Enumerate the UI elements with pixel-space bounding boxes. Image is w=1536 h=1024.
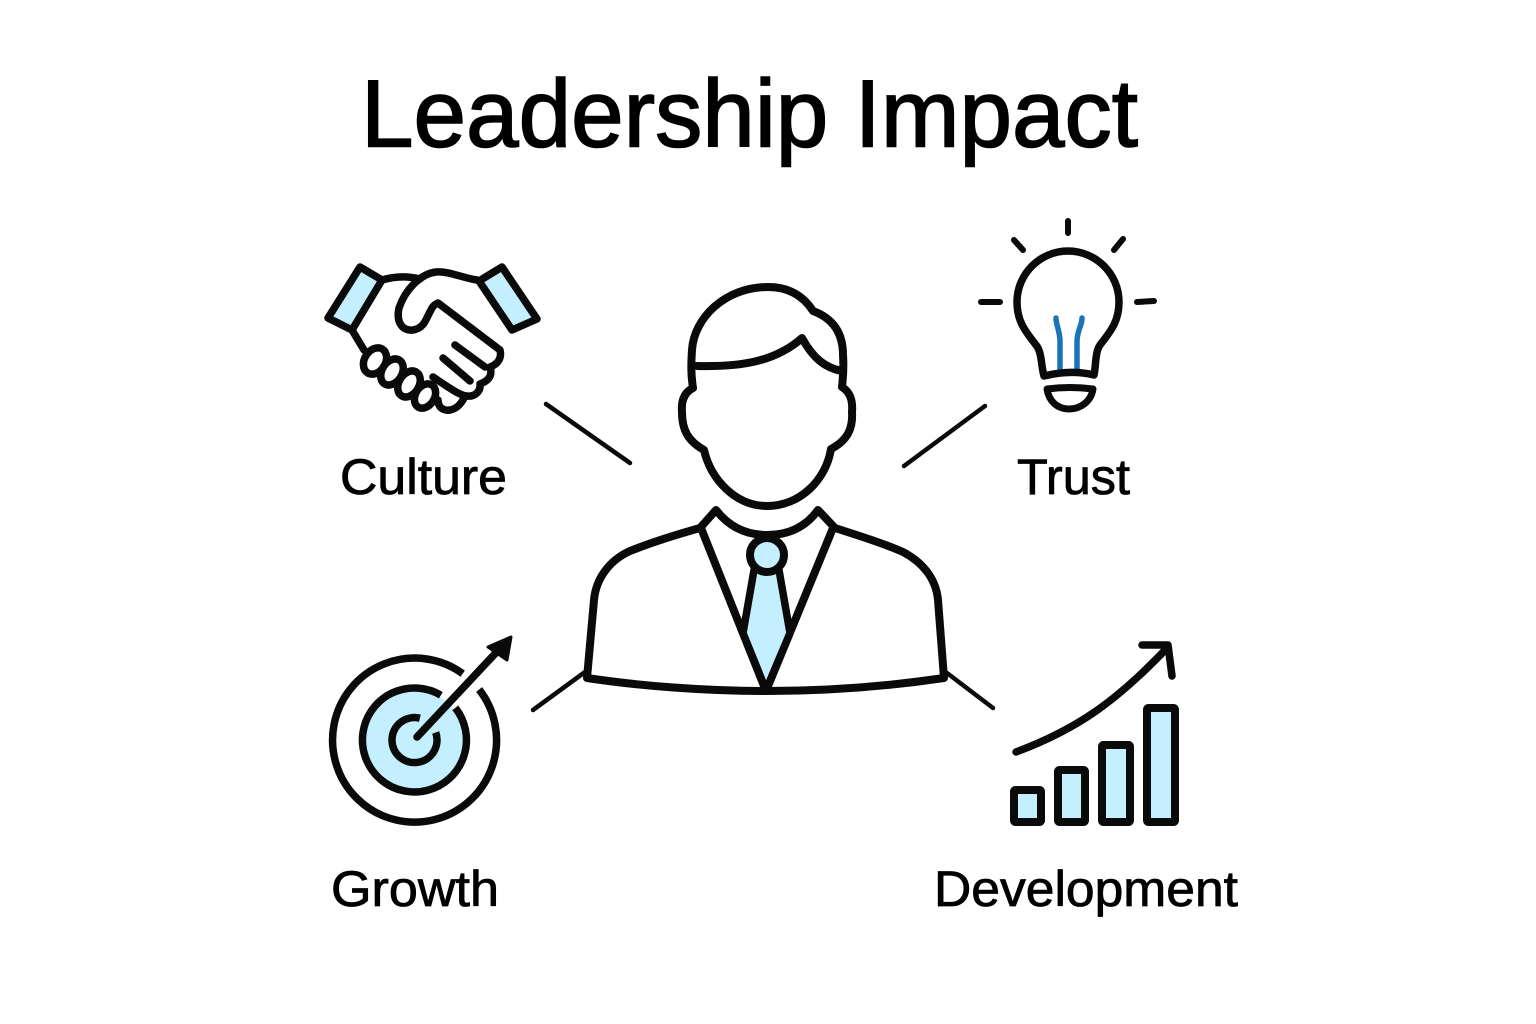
trend arrow xyxy=(1016,645,1172,752)
icon: handshake xyxy=(328,267,537,412)
leader head xyxy=(682,287,852,506)
bulb base xyxy=(1047,388,1093,409)
title: Leadership Impact xyxy=(361,60,1138,168)
target rings xyxy=(333,658,497,822)
icon: lightbulb xyxy=(981,221,1154,409)
hand knuckle 1 xyxy=(359,344,391,378)
bulb filaments xyxy=(1056,318,1082,369)
leader hair line xyxy=(697,338,842,371)
leader tie xyxy=(743,570,790,690)
bulb rays xyxy=(981,221,1154,302)
bar 2 xyxy=(1058,770,1085,822)
hand fingers xyxy=(443,345,485,381)
hand knuckle 2 xyxy=(376,355,408,389)
icon: bar chart xyxy=(1014,645,1175,822)
leader suit xyxy=(587,510,944,691)
connector: trust xyxy=(904,406,985,466)
bar 1 xyxy=(1014,790,1041,822)
hands outline xyxy=(352,272,501,410)
right cuff xyxy=(479,267,537,330)
target blue centre xyxy=(364,690,464,790)
label: Development: Development xyxy=(934,861,1238,917)
bar 3 xyxy=(1102,745,1130,822)
left cuff xyxy=(328,267,382,330)
icon: leader figure xyxy=(587,287,944,691)
label: Culture: Culture xyxy=(340,449,507,505)
connector: growth xyxy=(533,672,585,710)
bar 4 xyxy=(1147,708,1175,822)
target arrow head xyxy=(488,637,511,660)
connector: culture xyxy=(546,404,630,463)
leader tie knot xyxy=(750,538,784,572)
icon: target xyxy=(333,637,511,822)
label: Growth: Growth xyxy=(331,861,499,917)
bulb outline xyxy=(1017,251,1119,376)
label: Trust: Trust xyxy=(1017,449,1130,505)
connector: development xyxy=(947,673,993,708)
hand knuckle 4 xyxy=(410,380,440,412)
leader lapels xyxy=(701,528,833,691)
target arrow xyxy=(417,642,506,737)
hand knuckle 3 xyxy=(393,367,425,401)
